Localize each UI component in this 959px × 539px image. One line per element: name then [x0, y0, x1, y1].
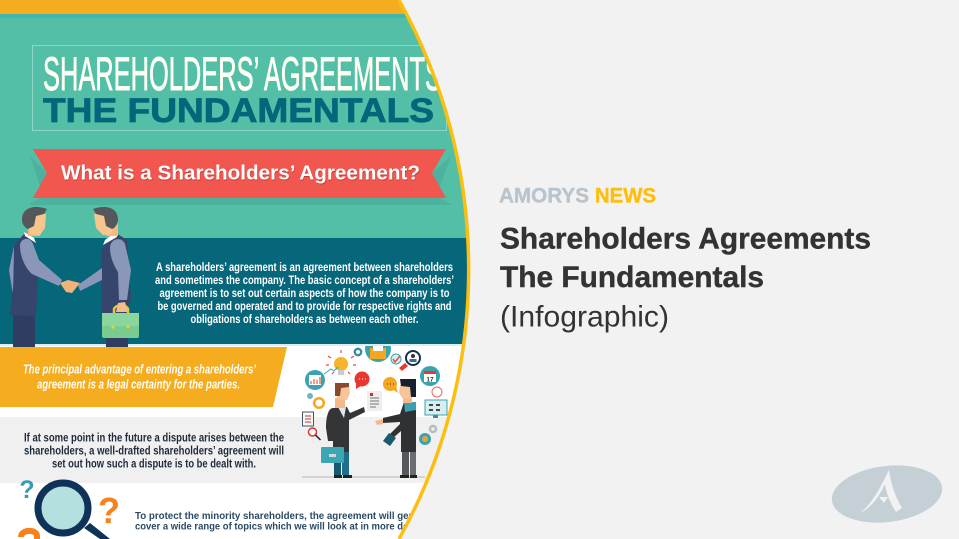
title line one: SHAREHOLDERS’ AGREEMENTS — [43, 47, 442, 100]
icon: trend arrow — [324, 367, 338, 374]
callout: principal advantage: The principal advantage of entering a shareholders’ — [23, 362, 256, 376]
panel: dispute: set out how such a dispute is to be dealt with. — [52, 456, 256, 470]
icon: calendar: 17 — [426, 376, 434, 384]
definition text: and sometimes the company. The basic concept of a shareholders’ — [155, 275, 454, 287]
arc border — [399, 0, 469, 539]
subtitle: (Infographic) — [500, 300, 669, 334]
document — [367, 391, 382, 411]
definition text: be governed and operated and to provide for respective rights and — [158, 301, 452, 313]
panel: dispute: shareholders, a well-drafted shareholders’ agreement will — [24, 444, 284, 458]
headline: The Fundamentals — [500, 261, 764, 294]
icon: bulb — [326, 350, 356, 375]
minority shareholders text: cover a wide range of topics which we will look at in more detail — [135, 522, 422, 532]
ribbon heading: What is a Shareholders’ Agreement? — [62, 164, 420, 186]
header background — [0, 0, 480, 240]
brand label: AMORYS — [499, 184, 589, 208]
ribbon heading — [28, 149, 452, 205]
icon: chart — [305, 370, 325, 390]
illustration: business icons — [302, 336, 447, 478]
panel: infographic preview — [0, 0, 480, 539]
icon: red speech bubble — [354, 372, 370, 389]
brand label: NEWS — [595, 184, 656, 208]
left businessman — [326, 383, 365, 478]
icon: small dot — [307, 393, 313, 399]
title line two: THE FUNDAMENTALS — [43, 92, 434, 130]
icon: calendar — [420, 366, 440, 386]
icon: dollar search — [308, 428, 320, 440]
minority shareholders text — [135, 511, 440, 532]
headline — [500, 222, 871, 334]
question mark orange left — [21, 531, 37, 539]
panel: dispute: If at some point in the future a dispute arises between the — [24, 430, 284, 444]
icon: person search — [399, 351, 420, 371]
ribbon heading: What is a Shareholders’ Agreement? — [61, 162, 420, 184]
icon: orange speech bubble — [383, 377, 398, 393]
icon: envelope — [365, 346, 391, 362]
icon: coin — [419, 433, 431, 445]
panel: dispute — [0, 417, 480, 483]
minority shareholders text: To protect the minority shareholders, the agreement will generally — [135, 511, 440, 522]
icon: monitor — [425, 400, 447, 418]
question mark teal: ? — [19, 476, 35, 504]
brand label — [499, 184, 656, 208]
illustration: handshake — [9, 207, 139, 347]
icon: check — [391, 354, 401, 364]
briefcase — [102, 302, 139, 338]
headline: Shareholders Agreements — [500, 222, 871, 256]
ground line — [302, 476, 425, 478]
teal briefcase — [321, 447, 344, 463]
logo — [829, 459, 945, 529]
right man — [78, 207, 131, 347]
icon: donut — [314, 398, 324, 408]
panel: definition — [0, 238, 480, 346]
icon: gear — [355, 349, 361, 355]
icon: grey gear — [430, 426, 436, 432]
callout: principal advantage: agreement is a legal certainty for the parties. — [37, 376, 240, 392]
right businessman — [375, 379, 417, 478]
definition text — [155, 262, 454, 326]
icon: clipboard — [302, 412, 314, 426]
left man — [9, 207, 62, 347]
illustration: magnifying glass — [19, 476, 120, 539]
callout: principal advantage — [0, 347, 287, 407]
hands — [60, 280, 80, 293]
icon: clock — [432, 387, 442, 397]
title box — [32, 46, 446, 130]
question mark orange right: ? — [98, 490, 120, 531]
definition text: agreement is to set out certain aspects of how the company is to — [160, 288, 450, 300]
definition text: A shareholders’ agreement is an agreement between shareholders — [156, 262, 453, 274]
definition text: obligations of shareholders as between each other. — [190, 314, 418, 326]
